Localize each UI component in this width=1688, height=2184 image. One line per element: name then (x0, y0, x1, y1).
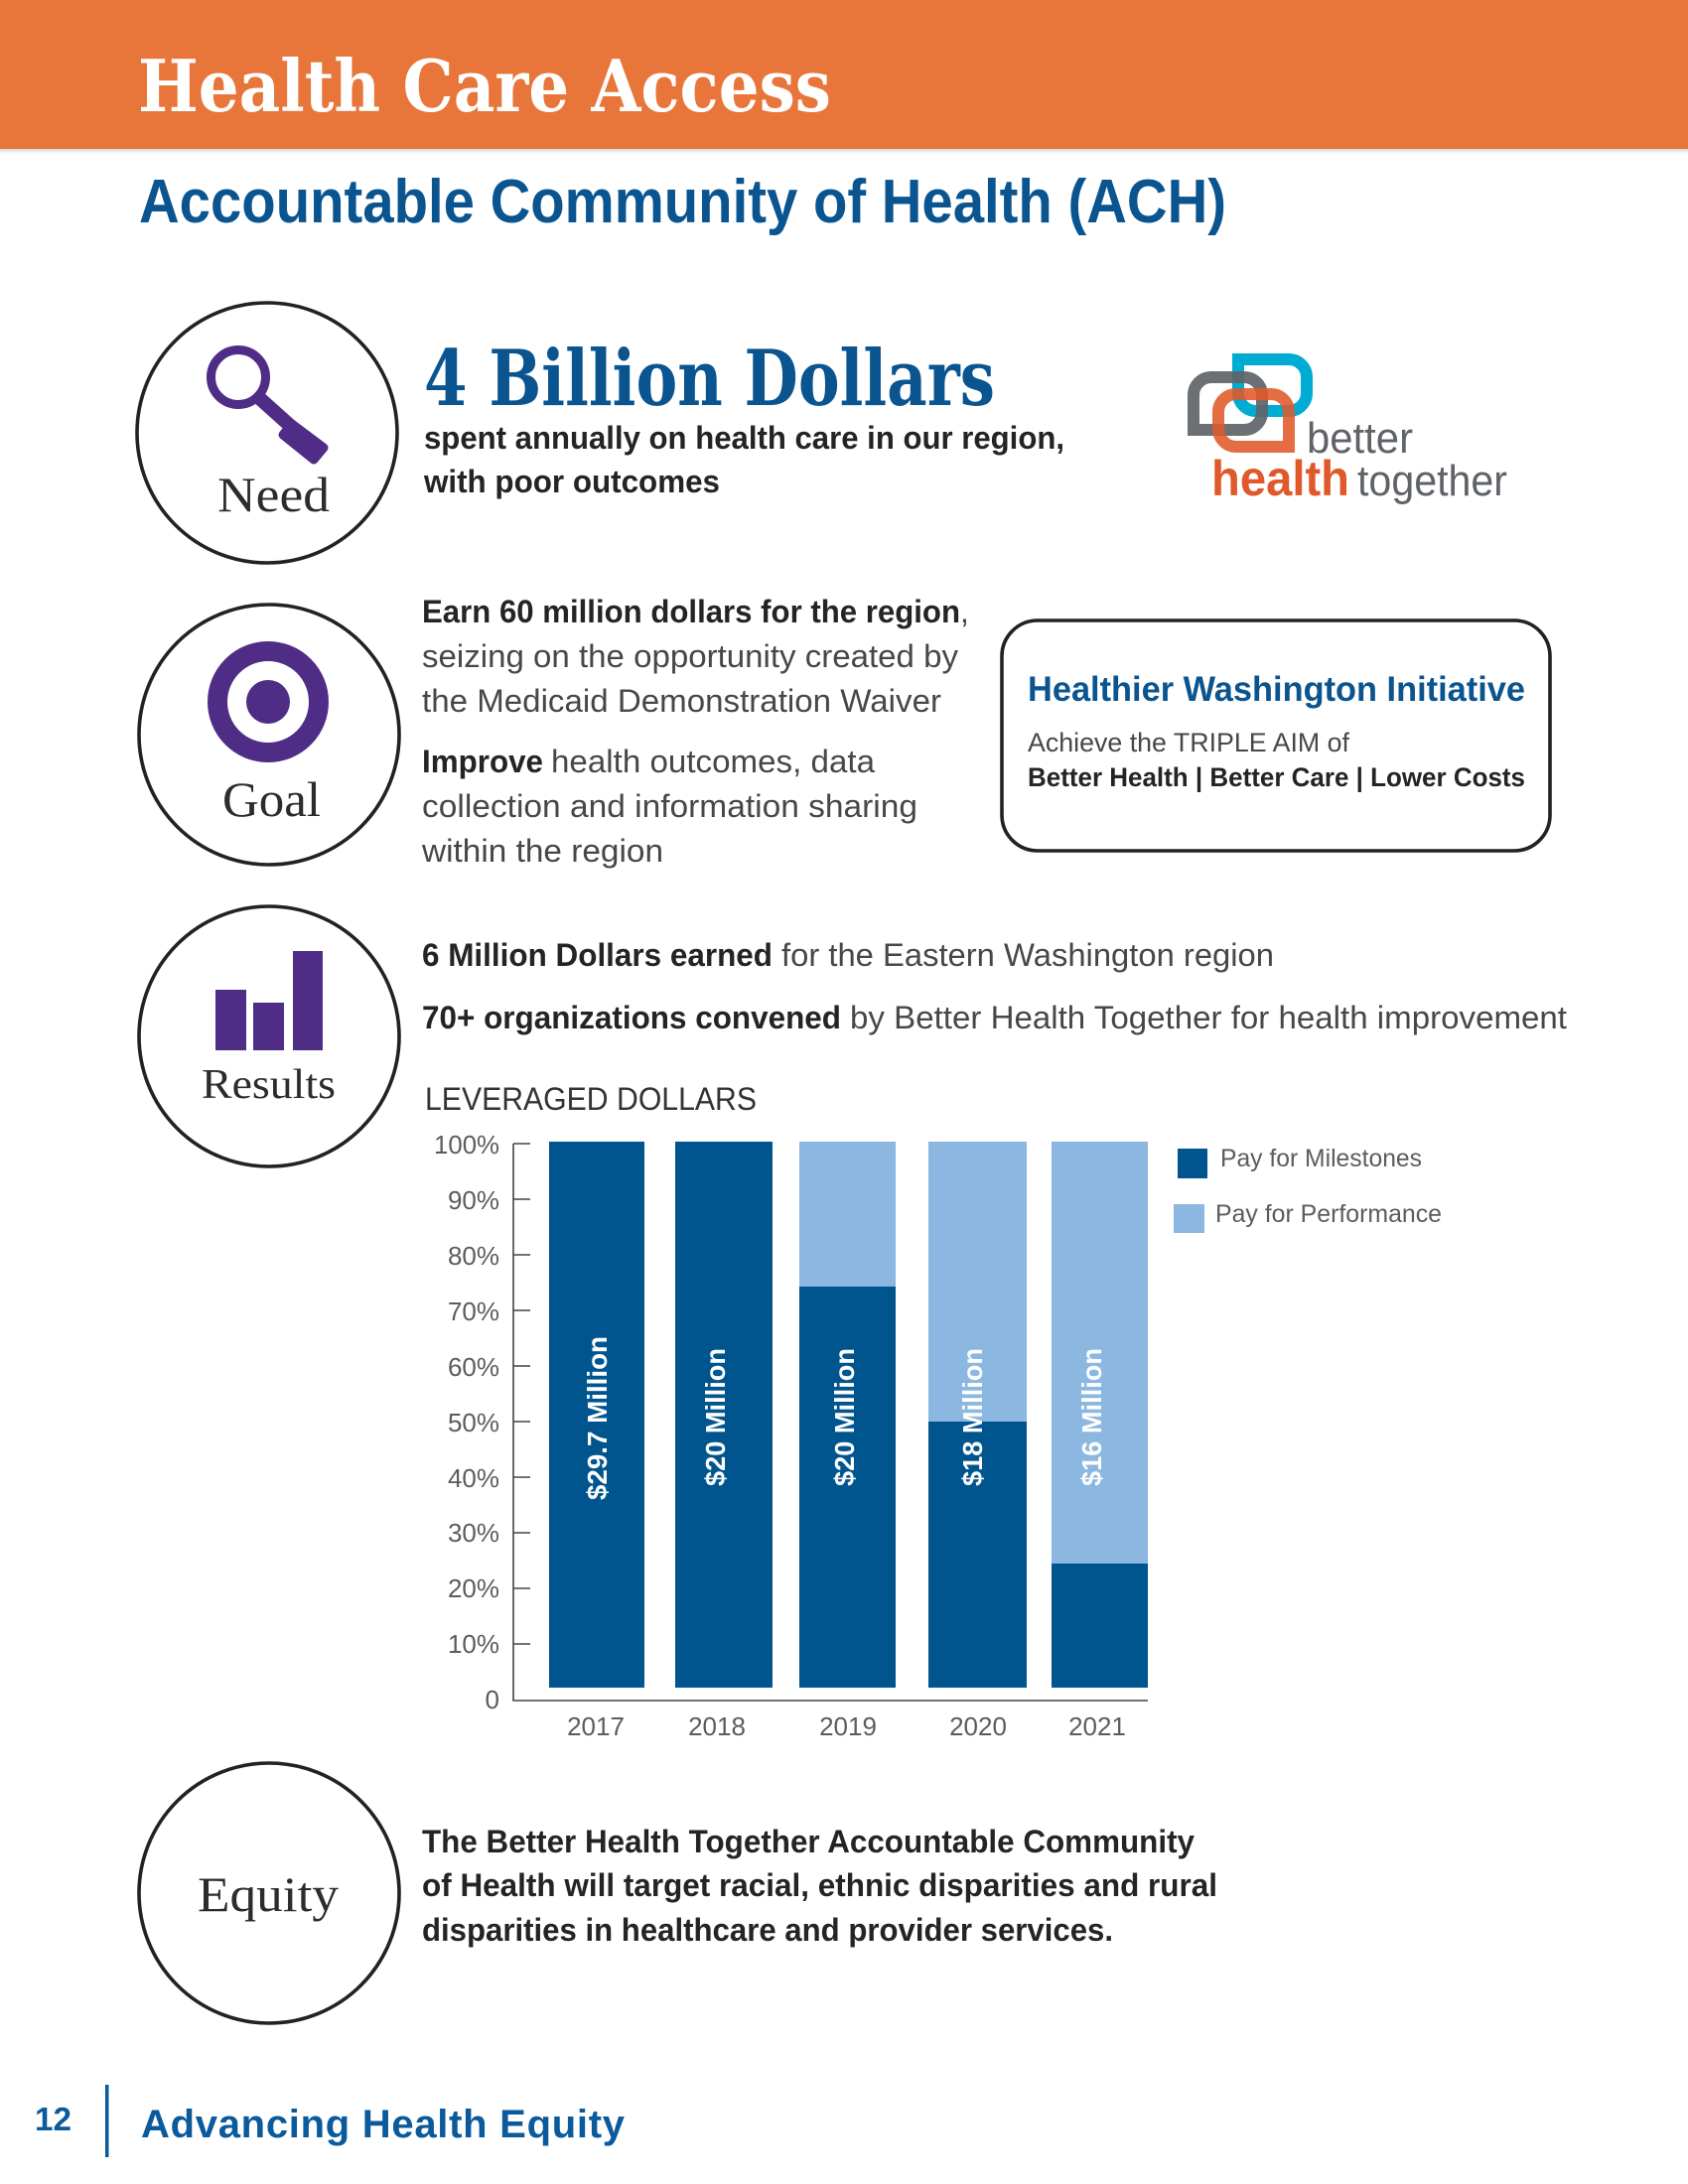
goal text: improve: within the region (421, 833, 663, 869)
equity text: The Better Health Together Accountable Community (422, 1824, 1195, 1859)
y axis: 20% (448, 1573, 499, 1603)
y axis: 80% (448, 1241, 499, 1271)
bar 2018: $20 Million (700, 1348, 731, 1486)
goal text: earn: , (960, 594, 969, 629)
goal text: earn: the Medicaid Demonstration Waiver (422, 683, 941, 719)
results text (422, 937, 1567, 1035)
goal text: improve: collection and information sharing (422, 788, 917, 824)
y axis: 30% (448, 1518, 499, 1548)
need description (423, 420, 1064, 499)
icon: bar chart (215, 951, 323, 1050)
need description: with poor outcomes (423, 464, 720, 499)
stacked bar chart (434, 1130, 1148, 1741)
page number: 12 (35, 2101, 71, 2137)
results text: 70+ organizations convened (422, 1000, 841, 1035)
results text: by Better Health Together for health improvement (850, 1000, 1567, 1035)
panel: goal (139, 605, 399, 865)
y axis: 40% (448, 1463, 499, 1493)
y axis: 60% (448, 1352, 499, 1382)
logo: better health together: health (1211, 451, 1349, 506)
y axis: 70% (448, 1297, 499, 1326)
bar 2021: $16 Million (1076, 1348, 1107, 1486)
bar 2018 (675, 1142, 773, 1741)
goal text: improve: Improve (422, 744, 543, 779)
bar 2017: 2017 (567, 1711, 625, 1741)
goal text: improve (421, 744, 917, 869)
bar 2017 (549, 1142, 644, 1741)
callout: healthier washington initiative: Healthier Washington Initiative (1028, 670, 1525, 709)
equity text: disparities in healthcare and provider services. (422, 1912, 1113, 1948)
footer (35, 2085, 626, 2157)
goal text: earn (422, 594, 969, 719)
bar 2019 (799, 1142, 896, 1741)
y axis (434, 1130, 1148, 1714)
subtitle: Accountable Community of Health (ACH) (139, 168, 1226, 236)
y axis: 0 (486, 1685, 499, 1714)
equity text (422, 1824, 1217, 1948)
icon: magnifying glass (211, 349, 324, 460)
bar 2020 (928, 1142, 1027, 1741)
bar 2019: $20 Million (829, 1348, 860, 1486)
equity text: of Health will target racial, ethnic disparities and rural (422, 1867, 1217, 1903)
panel: equity (139, 1763, 399, 2023)
legend (1174, 1145, 1442, 1233)
y axis: 50% (448, 1408, 499, 1437)
icon: target (217, 651, 319, 752)
results text: for the Eastern Washington region (781, 937, 1274, 973)
panel: results (139, 906, 399, 1166)
need description: spent annually on health care in our region, (424, 420, 1064, 456)
header banner (0, 0, 1688, 154)
results text: 6 Million Dollars earned (422, 937, 773, 973)
chart heading: LEVERAGED DOLLARS (425, 1081, 757, 1117)
callout: healthier washington initiative: Achieve the TRIPLE AIM of (1028, 728, 1349, 757)
bar 2019: 2019 (819, 1711, 877, 1741)
bar 2020: 2020 (949, 1711, 1007, 1741)
bar 2018: 2018 (688, 1711, 746, 1741)
logo: better health together: better (1307, 414, 1413, 463)
footer title: Advancing Health Equity (141, 2103, 626, 2146)
title: Health Care Access (138, 44, 831, 128)
y axis: 10% (448, 1629, 499, 1659)
goal label: Goal (222, 771, 321, 827)
goal text: earn: Earn 60 million dollars for the region (422, 594, 960, 629)
legend: Pay for Performance (1215, 1200, 1442, 1228)
callout: healthier washington initiative: Better Health | Better Care | Lower Costs (1028, 762, 1525, 792)
need label: Need (217, 467, 330, 522)
bar 2017: $29.7 Million (582, 1336, 613, 1500)
y axis: 90% (448, 1185, 499, 1215)
results label: Results (202, 1062, 336, 1108)
callout: healthier washington initiative (1002, 620, 1550, 851)
need headline: 4 Billion Dollars (424, 334, 995, 424)
legend: Pay for Milestones (1220, 1145, 1422, 1172)
bar 2020: $18 Million (957, 1348, 988, 1486)
panel: need (137, 303, 397, 563)
equity label: Equity (198, 1866, 339, 1922)
logo: better health together: together (1357, 457, 1507, 505)
logo: better health together (1194, 359, 1507, 506)
goal text: improve: health outcomes, data (551, 744, 875, 779)
y axis: 100% (434, 1130, 499, 1160)
goal text: earn: seizing on the opportunity created by (422, 638, 958, 674)
bar 2021 (1052, 1142, 1148, 1741)
bar 2021: 2021 (1068, 1711, 1126, 1741)
